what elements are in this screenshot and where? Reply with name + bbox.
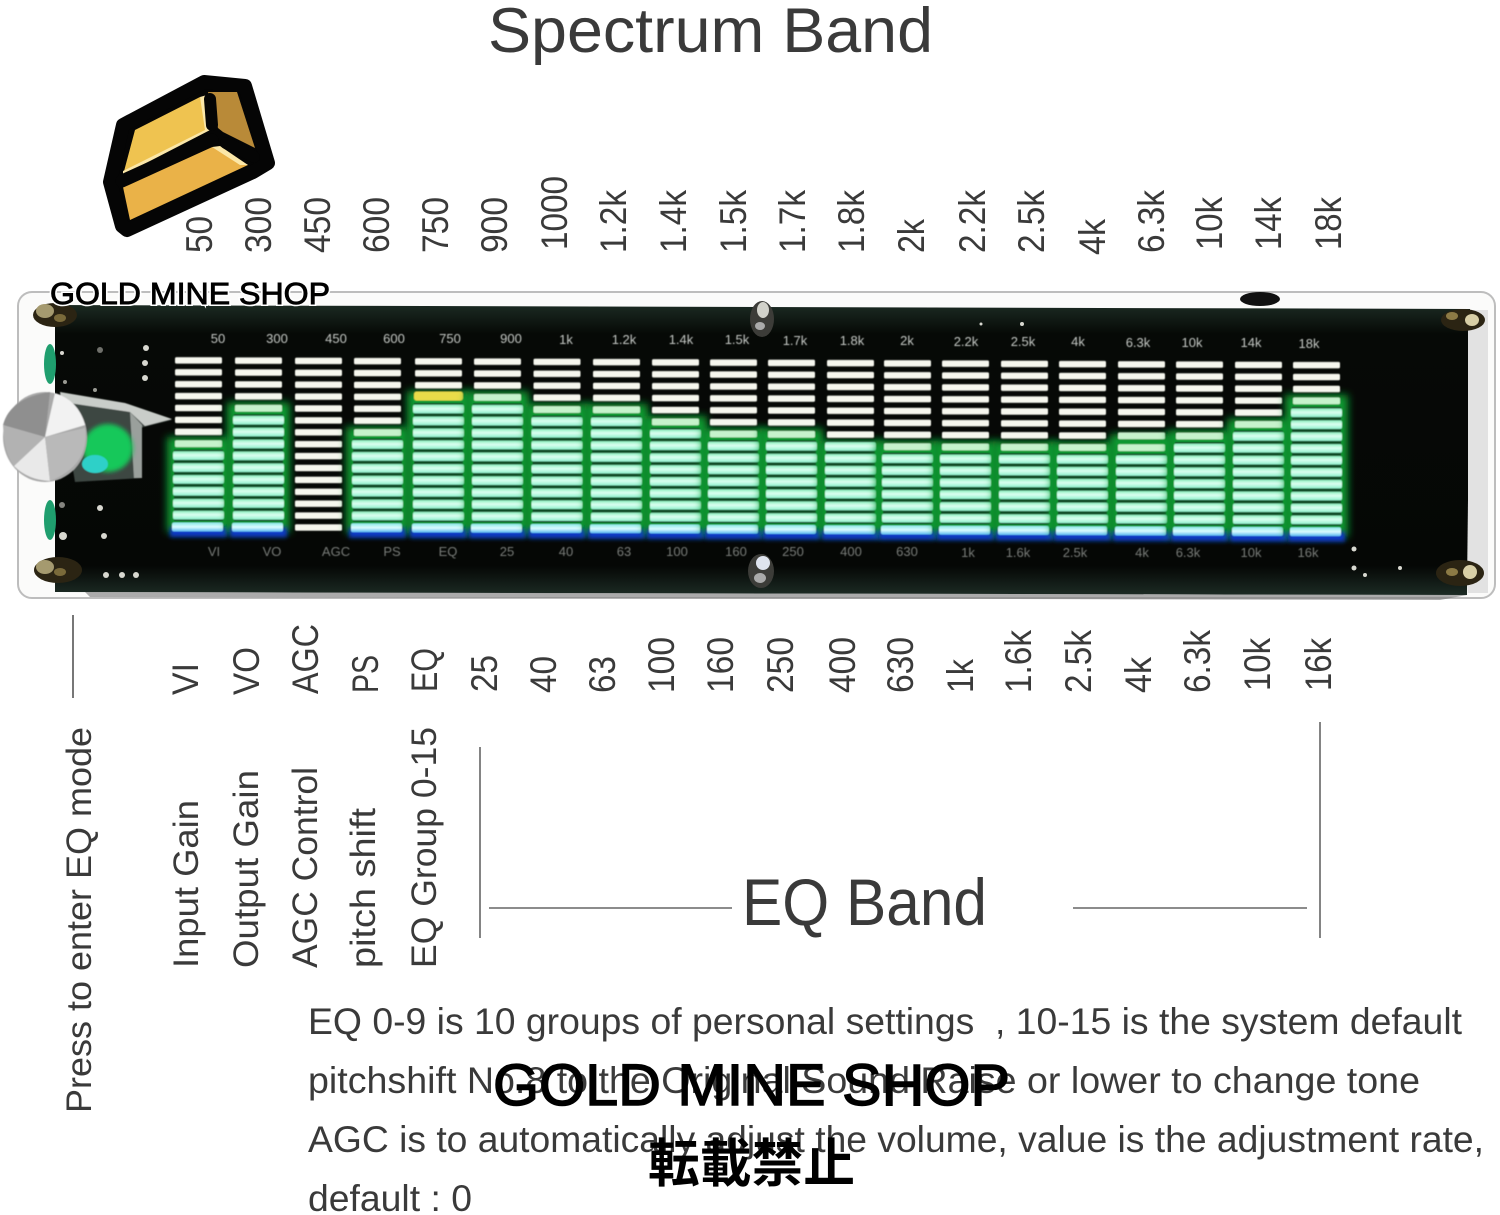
top frequency labels: 600 — [356, 197, 397, 253]
corner and centre screws — [33, 301, 1485, 588]
top frequency labels: 14k — [1248, 197, 1289, 250]
explanatory text block — [308, 1001, 1484, 1215]
bottom band labels: PS — [345, 655, 386, 693]
bottom band labels: 4k — [1118, 657, 1159, 693]
silver knob face — [3, 392, 87, 482]
top frequency labels: 1.8k — [831, 190, 872, 253]
LED column: 6.3k / 4k — [1110, 358, 1173, 541]
top frequency labels: 300 — [238, 197, 279, 253]
printed labels on panel top: 18k — [1299, 336, 1320, 351]
printed labels on panel bottom: 250 — [782, 544, 804, 559]
LED column: 14k / 10k — [1227, 359, 1290, 542]
case bottom shadow — [85, 592, 1467, 600]
black front panel — [55, 305, 1470, 595]
label: GOLD MINE SHOP small logo text: GOLD MINE SHOP — [50, 276, 330, 311]
LED column: 300 / VO — [227, 355, 290, 537]
bottom band labels: 630 — [880, 637, 921, 693]
printed labels on panel top: 750 — [439, 331, 461, 346]
top frequency labels: 1.4k — [653, 190, 694, 253]
bottom band labels: VI — [165, 663, 206, 695]
rotated description: pitch shift: pitch shift — [344, 808, 383, 968]
label halo behind small logo text: GOLD MINE SHOP — [50, 276, 330, 311]
top frequency labels: 6.3k — [1131, 190, 1172, 253]
rotated description: press to enter EQ mode: Press to enter EQ mode — [60, 727, 99, 1113]
LED column: 10k / 6.3k — [1168, 359, 1231, 541]
explanatory text block: pitchshift No.8 to the Original Sound Raise or lower to change tone — [308, 1060, 1420, 1101]
bottom band labels: 1k — [940, 659, 981, 693]
printed labels on panel top: 14k — [1241, 335, 1262, 350]
printed labels on panel bottom: 4k — [1135, 545, 1149, 560]
printed labels on panel top: 2.2k — [954, 334, 979, 349]
top frequency labels: 1.5k — [713, 190, 754, 253]
LED column: 4k / 2.5k — [1051, 358, 1114, 541]
printed labels on panel bottom: 16k — [1298, 545, 1319, 560]
bottom band labels: 25 — [464, 655, 505, 692]
explanatory text block: AGC is to automatically adjust the volume, value is the adjustment rate, — [308, 1119, 1484, 1160]
LED column: 600 / PS — [346, 355, 409, 538]
printed labels on panel bottom: 25 — [500, 544, 514, 559]
line: press button leader — [72, 615, 74, 698]
LED column: 750 / EQ with yellow peak — [407, 355, 470, 538]
printed labels on panel top: 1.5k — [725, 332, 750, 347]
printed labels on panel bottom: 6.3k — [1176, 545, 1201, 560]
bottom band labels: 40 — [523, 656, 564, 693]
bottom band labels: 250 — [760, 637, 801, 693]
bottom band labels: 63 — [582, 656, 623, 693]
top frequency labels: 50 — [179, 216, 220, 253]
heading: EQ Band: EQ Band — [742, 865, 987, 939]
watermark: no reprint: 転載禁止 — [648, 1136, 855, 1194]
LED column: 18k / 16k — [1285, 359, 1348, 542]
top frequency labels: 10k — [1189, 197, 1230, 250]
bottom band labels: 160 — [700, 637, 741, 693]
bottom band labels: VO — [226, 647, 267, 695]
green lit shaft — [83, 424, 133, 472]
printed labels on panel bottom: 100 — [666, 544, 688, 559]
printed labels on panel top: 600 — [383, 331, 405, 346]
bottom band labels: 2.5k — [1058, 630, 1099, 693]
LED column: 1.8k / 400 — [819, 357, 882, 540]
rotated description: AGC control: AGC Control — [286, 767, 325, 968]
bottom band labels: 400 — [822, 637, 863, 693]
rotated description: EQ group: EQ Group 0-15 — [405, 727, 444, 968]
printed labels on panel top: 450 — [325, 331, 347, 346]
push button top — [1240, 292, 1280, 306]
watermark: GOLD MINE SHOP: GOLD MINE SHOP — [493, 1053, 1010, 1118]
printed labels on panel bottom: VI — [208, 544, 220, 559]
printed labels on panel bottom: 630 — [896, 544, 918, 559]
bottom band labels: 16k — [1298, 638, 1339, 691]
device case — [18, 292, 1495, 598]
top frequency labels: 2k — [891, 219, 932, 253]
top frequency labels: 450 — [297, 197, 338, 253]
knob bracket — [60, 392, 172, 482]
LED column: 900 / 25 — [466, 356, 529, 538]
printed labels on panel bottom: 63 — [617, 544, 631, 559]
printed labels on panel top: 1k — [559, 332, 573, 347]
printed labels on panel top: 1.2k — [612, 332, 637, 347]
icon: gold bar logo — [110, 82, 268, 230]
volume knob — [3, 392, 172, 482]
printed labels on panel top: 10k — [1182, 335, 1203, 350]
explanatory text block: EQ 0-9 is 10 groups of personal settings , 10-15 is the system default — [308, 1001, 1463, 1042]
LED column: 2.5k / 1.6k — [993, 358, 1056, 540]
top frequency labels — [179, 176, 1349, 255]
bottom band labels: EQ — [404, 648, 445, 692]
bottom band labels: AGC — [285, 624, 326, 694]
printed labels on panel top — [211, 331, 1320, 351]
bottom band labels: 1.6k — [998, 630, 1039, 693]
top frequency labels: 1.2k — [593, 190, 634, 253]
LED column: 50 / VI — [167, 354, 230, 537]
printed labels on panel top: 1.7k — [783, 333, 808, 348]
LED column: 1k / 40 — [526, 356, 588, 538]
printed labels on panel top: 300 — [266, 331, 288, 346]
printed labels on panel top: 50 — [211, 331, 225, 346]
LED column: 1.4k / 100 — [644, 356, 707, 539]
top frequency labels: 4k — [1072, 219, 1113, 255]
printed labels on panel bottom: 1.6k — [1006, 545, 1031, 560]
printed labels on panel bottom: 40 — [559, 544, 573, 559]
printed labels on panel bottom: 10k — [1241, 545, 1262, 560]
teal side LEDs — [44, 344, 56, 540]
printed labels on panel top: 4k — [1071, 334, 1085, 349]
bottom band labels — [165, 624, 1339, 695]
bottom band labels: 10k — [1237, 638, 1278, 691]
top frequency labels: 750 — [415, 197, 456, 253]
LED column: 450 / AGC (unlit) — [295, 355, 342, 533]
top frequency labels: 2.2k — [952, 190, 993, 253]
bottom band labels: 6.3k — [1177, 630, 1218, 693]
rotated description: output gain: Output Gain — [227, 770, 266, 968]
printed labels on panel bottom: PS — [383, 544, 401, 559]
device: spectrum analyzer panel — [3, 292, 1495, 600]
printed labels on panel bottom: EQ — [439, 544, 457, 559]
top frequency labels: 2.5k — [1011, 190, 1052, 253]
LED column: 1.7k / 250 — [760, 357, 823, 540]
printed labels on panel top: 2k — [900, 333, 914, 348]
side strip — [1468, 310, 1488, 593]
rotated description: input gain: Input Gain — [167, 800, 206, 968]
top frequency labels: 1.7k — [772, 190, 813, 253]
printed labels on panel bottom: VO — [263, 544, 281, 559]
LED column: 1.5k / 160 — [702, 357, 765, 539]
top frequency labels: 18k — [1308, 197, 1349, 250]
printed labels on panel bottom — [208, 544, 1319, 560]
printed labels on panel top: 2.5k — [1011, 334, 1036, 349]
EQ band bracket — [480, 722, 1320, 938]
printed labels on panel bottom: 2.5k — [1063, 545, 1088, 560]
LED bar array — [167, 354, 1348, 542]
printed labels on panel bottom: 160 — [725, 544, 747, 559]
printed labels on panel top: 900 — [500, 331, 522, 346]
LED column: 1.2k / 63 — [585, 356, 648, 539]
LED column: 2k / 630 — [876, 357, 939, 540]
LED column: 2.2k / 1k — [934, 358, 997, 540]
printed labels on panel top: 6.3k — [1126, 335, 1151, 350]
PCB dots — [59, 322, 1402, 578]
top frequency labels: 900 — [474, 197, 515, 253]
printed labels on panel top: 1.4k — [669, 332, 694, 347]
printed labels on panel bottom: AGC — [322, 544, 350, 559]
printed labels on panel top: 1.8k — [840, 333, 865, 348]
printed labels on panel bottom: 400 — [840, 544, 862, 559]
printed labels on panel bottom: 1k — [961, 545, 975, 560]
top frequency labels: 1000 — [534, 176, 575, 250]
bottom band labels: 100 — [641, 637, 682, 693]
